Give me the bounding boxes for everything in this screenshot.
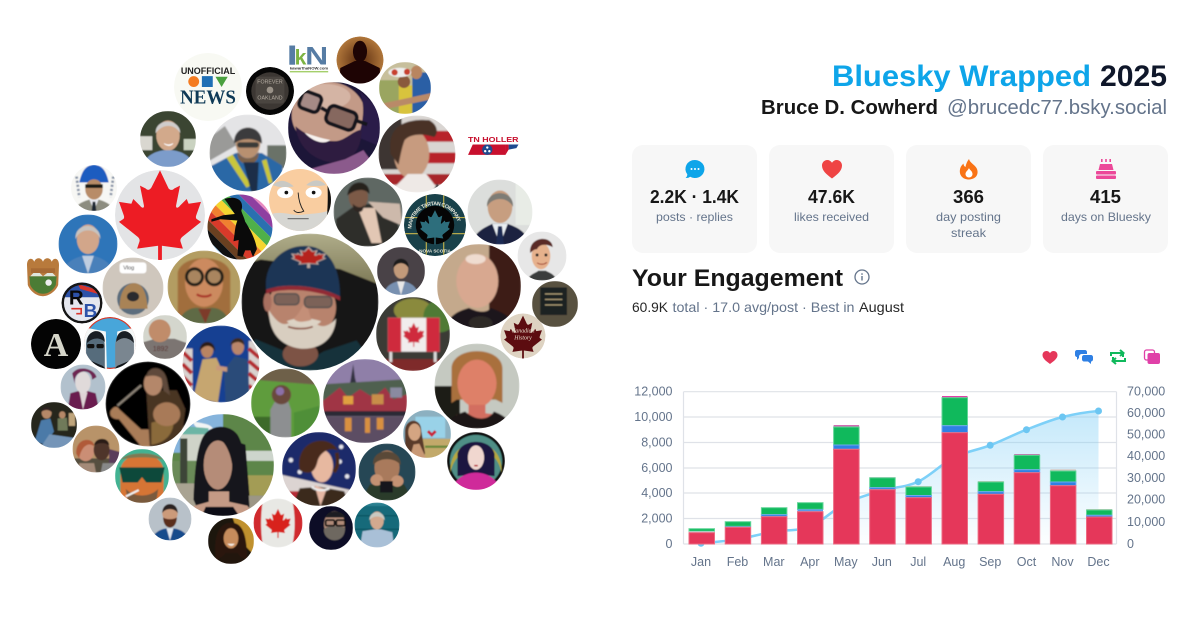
month labels: Apr	[800, 555, 820, 569]
month labels: Jan	[691, 555, 711, 569]
avatar: man in blue party hat	[71, 165, 117, 211]
avatar: man in grey t-shirt: 1892	[153, 346, 168, 353]
bar: Oct	[1014, 454, 1040, 544]
avatar: two people with flags	[182, 326, 260, 402]
avatar: Maritime Tartan Company badge: MARITIME TARTAN COMPANY	[408, 202, 461, 228]
avatar: purple-tinted portrait	[60, 364, 106, 410]
avatar: RB logo: R	[69, 287, 84, 310]
avatar: Canadian History leaf: History	[513, 336, 532, 342]
right axis labels: 40,000	[1127, 449, 1165, 463]
title: Bluesky Wrapped: Bluesky Wrapped	[832, 60, 1091, 93]
avatar: kN logo	[289, 43, 329, 72]
cumulative line	[701, 411, 1098, 543]
avatar: woman with dark curls	[208, 518, 254, 564]
avatar: seated man	[31, 402, 77, 448]
engagement summary: August	[859, 299, 904, 315]
icon: flame	[960, 159, 978, 180]
left axis labels	[634, 384, 673, 551]
avatar: vlog bubble: Vlog	[123, 266, 134, 272]
engagement summary: 60.9K	[632, 299, 669, 315]
avatar: man in dark coat	[334, 178, 402, 246]
avatar: man with glasses	[288, 82, 380, 174]
avatar: couple	[72, 426, 120, 472]
bar: Apr	[798, 503, 823, 544]
avatar: Forever Oakland badge: FOREVER	[257, 79, 283, 85]
legend icon: replies	[1075, 350, 1093, 364]
title: year: 2025	[1100, 60, 1167, 93]
avatar: man in grey t-shirt	[143, 315, 187, 359]
engagement summary: total · 17.0 avg/post · Best in	[672, 299, 854, 315]
month labels: Dec	[1087, 555, 1110, 569]
avatar: man in navy suit	[468, 180, 532, 244]
header: user identity	[761, 97, 1167, 119]
engagement summary	[632, 299, 904, 315]
legend icon: quotes	[1144, 350, 1160, 364]
bar: Nov	[1050, 469, 1076, 544]
avatar: group photo	[379, 62, 434, 114]
avatar: kN logo: kawarthaNOW.com	[290, 67, 329, 71]
stat label: day posting	[936, 210, 1001, 224]
avatar: Canadian History leaf	[500, 314, 546, 359]
left axis labels: 6,000	[641, 461, 673, 475]
avatar: cartoon puppet	[518, 232, 566, 280]
month labels: Sep	[979, 555, 1001, 569]
right axis labels: 30,000	[1127, 471, 1165, 485]
avatar: bald man	[437, 244, 521, 330]
avatar: smiling older man	[140, 111, 196, 167]
right axis labels: 10,000	[1127, 515, 1165, 529]
avatar: vlog bubble	[102, 258, 164, 318]
stat label	[936, 210, 1001, 240]
bar: May	[834, 425, 859, 544]
right axis labels: 0	[1127, 537, 1134, 551]
month labels: Jul	[910, 555, 926, 569]
left axis labels: 10,000	[634, 410, 673, 424]
avatar: kN logo: k	[295, 47, 307, 70]
panel: likes received	[769, 145, 894, 253]
avatar: blonde woman	[434, 344, 520, 428]
avatar: TN Holler logo: TN HOLLER	[468, 135, 519, 144]
stat label: posts · replies	[656, 210, 733, 224]
avatar: dark plaque	[532, 281, 578, 327]
avatar: teacher with screen	[403, 410, 451, 458]
avatar: bearded man in blue suit	[148, 498, 192, 540]
avatar: Canadian flag sign	[376, 297, 456, 371]
bar: Mar	[761, 508, 787, 544]
avatar: Canadian History leaf: Canadian	[511, 328, 535, 334]
month labels: Jun	[872, 555, 892, 569]
stat label: streak	[951, 226, 987, 240]
avatar: Canadian maple leaf	[115, 170, 205, 265]
avatar: woman with long dark hair	[172, 414, 274, 516]
stat value: 415	[1090, 187, 1121, 207]
month labels: May	[834, 555, 858, 569]
stat label: days on Bluesky	[1061, 210, 1151, 224]
cumulative area	[701, 411, 1098, 544]
month labels: Mar	[763, 555, 785, 569]
panel: days on Bluesky	[1043, 145, 1168, 253]
avatar: worker in hi-vis jacket	[210, 114, 286, 192]
avatar: warrior figure	[106, 362, 190, 446]
left axis labels: 0	[666, 537, 673, 551]
avatar: kN logo: N	[305, 43, 328, 71]
month labels: Feb	[727, 555, 748, 569]
avatar: Canada flag sphere	[254, 498, 302, 548]
bar: Jan	[689, 529, 714, 544]
month labels: Oct	[1017, 555, 1037, 569]
avatar: woman with round glasses	[168, 250, 240, 324]
avatar: Forever Oakland badge	[246, 67, 294, 115]
avatar: Forever Oakland badge: OAKLAND	[257, 96, 283, 102]
avatar: man before US flag	[378, 116, 456, 192]
avatar: man with hands by face	[358, 444, 416, 500]
avatar: smiling man on blue	[58, 214, 118, 274]
left axis labels: 2,000	[641, 512, 673, 526]
avatar: woman before US flag	[282, 432, 356, 506]
right axis labels: 50,000	[1127, 428, 1165, 442]
panel: posts and replies	[632, 145, 757, 253]
bar: Feb	[725, 522, 751, 544]
avatar: RB logo: B	[84, 300, 97, 321]
avatar: illustrated girl	[447, 432, 505, 490]
avatar: cartoon bald man	[269, 169, 331, 231]
legend icon: likes	[1042, 351, 1058, 364]
bar: Sep	[978, 481, 1004, 544]
bar: Jul	[906, 486, 931, 544]
avatar: man with light jacket	[377, 247, 425, 295]
month labels: Nov	[1051, 555, 1074, 569]
left axis labels: 12,000	[634, 384, 673, 398]
grid lines	[684, 392, 1116, 544]
avatar: Maritime Tartan Company badge	[404, 194, 466, 256]
stat value: 366	[953, 187, 984, 207]
avatar cluster	[27, 36, 578, 564]
avatar: twin men	[84, 317, 136, 369]
avatar: RB logo	[62, 282, 102, 324]
avatar: Unofficial News logo: NEWS	[180, 86, 236, 108]
bar: Jun	[870, 477, 895, 544]
legend icon: reposts	[1111, 350, 1125, 364]
avatar: pride stripes silhouette	[208, 194, 272, 260]
left axis labels: 4,000	[641, 486, 673, 500]
stat label: likes received	[794, 210, 869, 224]
icon: birthday cake	[1096, 159, 1116, 179]
line markers	[698, 408, 1102, 547]
header: title	[832, 60, 1167, 93]
avatar: painted smoking face	[115, 449, 169, 503]
avatar: harbour town	[323, 359, 407, 443]
right axis labels: 70,000	[1127, 384, 1165, 398]
avatar: TN Holler logo	[468, 135, 519, 155]
bar: Dec	[1086, 509, 1112, 544]
stat value: 2.2K · 1.4K	[650, 187, 739, 207]
chart: monthly engagement with cumulative line	[634, 384, 1165, 569]
right axis labels: 20,000	[1127, 492, 1165, 506]
left axis labels: 8,000	[641, 436, 673, 450]
avatar: letter A logo	[31, 319, 81, 369]
stat value: 47.6K	[808, 187, 855, 207]
avatar: grey-haired man	[354, 502, 400, 548]
avatar: Unofficial News logo: UNOFFICIAL	[181, 66, 236, 76]
icon: chat bubble	[685, 160, 704, 178]
month labels: Aug	[943, 555, 965, 569]
avatar: silhouette	[336, 36, 384, 84]
handle: @brucedc77.bsky.social	[947, 97, 1167, 119]
avatar: main user portrait	[242, 234, 378, 370]
right axis labels	[1127, 384, 1165, 551]
stacked bars	[689, 396, 1112, 544]
month labels	[691, 555, 1110, 569]
avatar: badge shield	[27, 258, 59, 296]
right axis labels: 60,000	[1127, 406, 1165, 420]
avatar: Maritime Tartan Company badge: NOVA SCOTIA	[419, 248, 452, 253]
avatar: garden sphere	[251, 368, 320, 438]
chart legend	[1042, 350, 1160, 364]
panel: posting streak	[906, 145, 1031, 253]
avatar: Unofficial News logo	[174, 53, 242, 121]
heading: Your Engagement: Your Engagement	[632, 265, 843, 292]
bar: Aug	[942, 396, 968, 544]
icon: info	[855, 270, 869, 284]
avatar: man with black glasses	[309, 506, 353, 550]
icon: heart	[822, 160, 842, 178]
avatar: letter A logo: A	[44, 327, 69, 364]
display name: Bruce D. Cowherd	[761, 97, 938, 119]
